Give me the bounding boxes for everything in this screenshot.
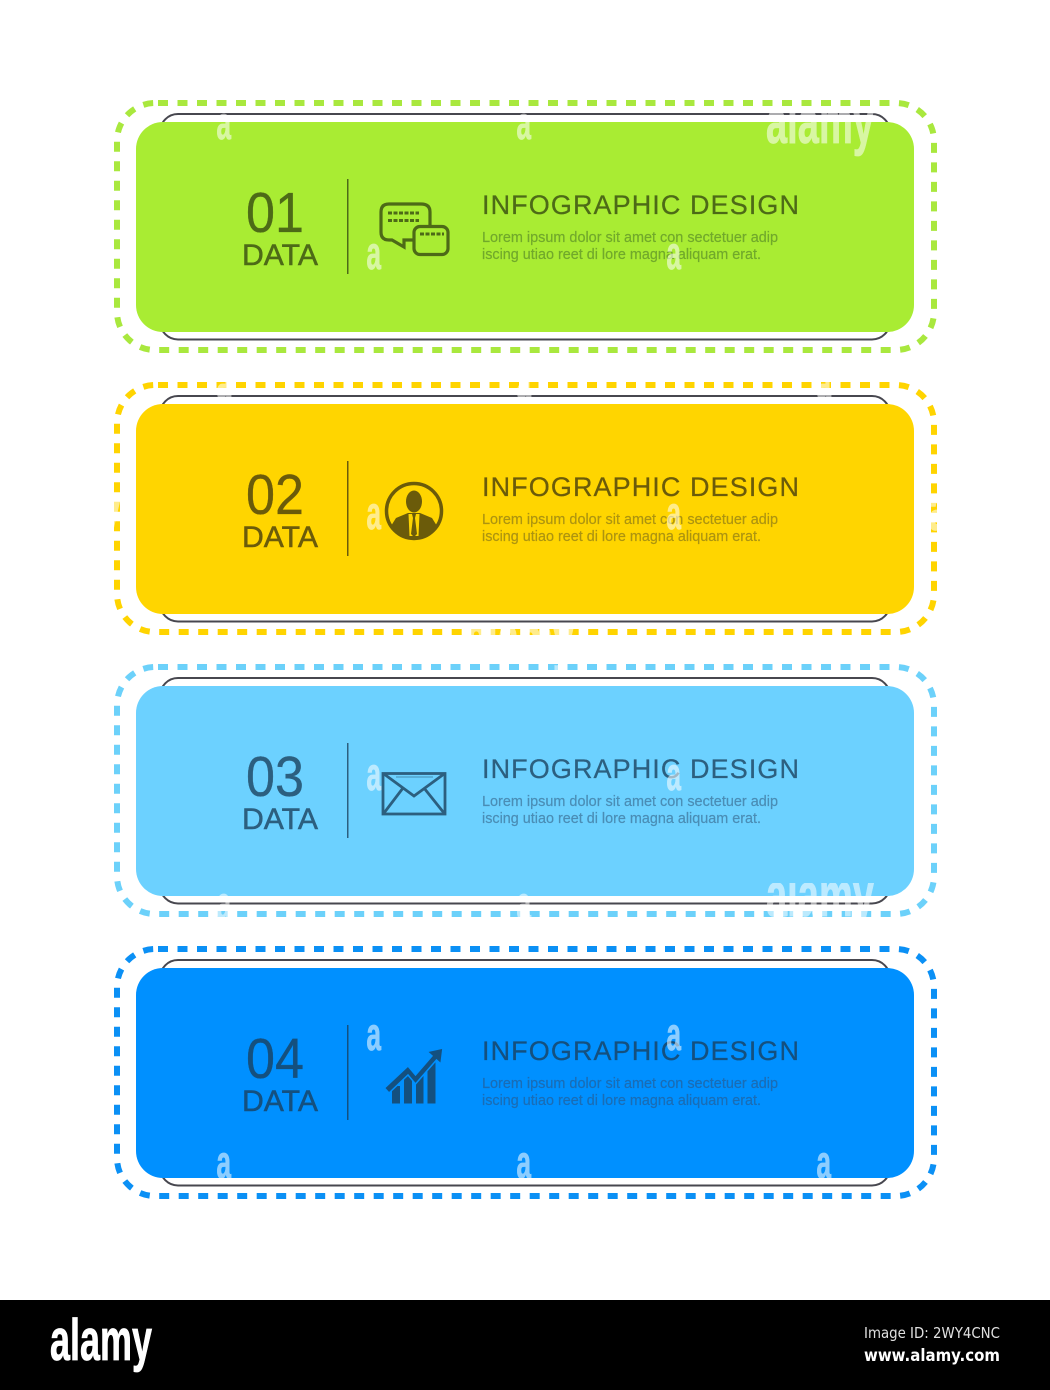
heading: INFOGRAPHIC DESIGN (482, 472, 799, 502)
label: DATA (242, 1085, 318, 1118)
panel: 04 blue (117, 949, 934, 1196)
body text: Lorem ipsum dolor sit amet con sectetuer adip (482, 230, 778, 246)
icon: businessman (386, 484, 442, 539)
body text (482, 1076, 778, 1109)
watermark overlay: a (366, 487, 381, 539)
card (136, 968, 914, 1178)
footer bar (0, 1300, 1050, 1390)
dashed frame (117, 667, 934, 914)
watermark overlay: a (816, 1136, 831, 1188)
label: DATA (242, 521, 318, 554)
outline frame (160, 960, 890, 1186)
number: 03 (246, 745, 304, 809)
watermark overlay: a (516, 97, 531, 149)
body text: Lorem ipsum dolor sit amet con sectetuer adip (482, 1076, 778, 1092)
watermark overlay: a (666, 487, 681, 539)
watermark overlay: a (216, 97, 231, 149)
watermark overlay: a (666, 227, 681, 279)
body text (482, 794, 778, 827)
outline frame (160, 114, 890, 340)
watermark overlay: a (216, 357, 231, 409)
watermark overlay: a (666, 1008, 681, 1060)
body text: iscing utiao reet di lore magna aliquam erat. (482, 529, 761, 545)
heading: INFOGRAPHIC DESIGN (482, 754, 799, 784)
panel: 01 green (117, 103, 934, 350)
watermark overlay: a (366, 748, 381, 800)
heading: INFOGRAPHIC DESIGN (482, 190, 799, 220)
watermark overlay: alamy (766, 861, 874, 930)
watermark overlay: a (516, 357, 531, 409)
body text (482, 230, 778, 263)
dashed frame (117, 949, 934, 1196)
number: 01 (246, 181, 304, 245)
watermark overlay: a (216, 877, 231, 929)
icon: chat bubbles (381, 204, 448, 254)
watermark overlay: alamy (466, 604, 574, 673)
divider (347, 743, 348, 838)
divider (347, 179, 348, 274)
watermark overlay: a (366, 227, 381, 279)
image id: Image ID: 2WY4CNC (864, 1324, 1000, 1342)
watermark overlay: alamy (13, 475, 121, 544)
outline frame (160, 396, 890, 622)
watermark overlay: a (216, 1136, 231, 1188)
number: 04 (246, 1027, 304, 1091)
body text (482, 512, 778, 545)
watermark overlay (114, 113, 937, 1178)
logo: alamy (50, 1308, 152, 1373)
heading: INFOGRAPHIC DESIGN (482, 1036, 799, 1066)
outline frame (160, 678, 890, 904)
divider (347, 461, 348, 556)
divider (347, 1025, 348, 1120)
body text: iscing utiao reet di lore magna aliquam erat. (482, 1093, 761, 1109)
body text: iscing utiao reet di lore magna aliquam erat. (482, 247, 761, 263)
body text: iscing utiao reet di lore magna aliquam erat. (482, 811, 761, 827)
panel: 03 light blue (117, 667, 934, 914)
number: 02 (246, 463, 304, 527)
card (136, 122, 914, 332)
body text: Lorem ipsum dolor sit amet con sectetuer adip (482, 512, 778, 528)
card (136, 404, 914, 614)
icon: growth chart (384, 1048, 443, 1104)
website: www.alamy.com (864, 1346, 1000, 1366)
watermark overlay: a (516, 1136, 531, 1188)
watermark overlay: a (366, 1008, 381, 1060)
dashed frame (117, 385, 934, 632)
watermark overlay: a (516, 877, 531, 929)
card (136, 686, 914, 896)
label: DATA (242, 239, 318, 272)
dashed frame (117, 103, 934, 350)
watermark overlay: alamy (766, 88, 874, 157)
label: DATA (242, 803, 318, 836)
icon: envelope (383, 774, 445, 814)
watermark overlay: a (666, 748, 681, 800)
body text: Lorem ipsum dolor sit amet con sectetuer adip (482, 794, 778, 810)
panel: 02 yellow (117, 385, 934, 632)
watermark overlay: a (816, 357, 831, 409)
